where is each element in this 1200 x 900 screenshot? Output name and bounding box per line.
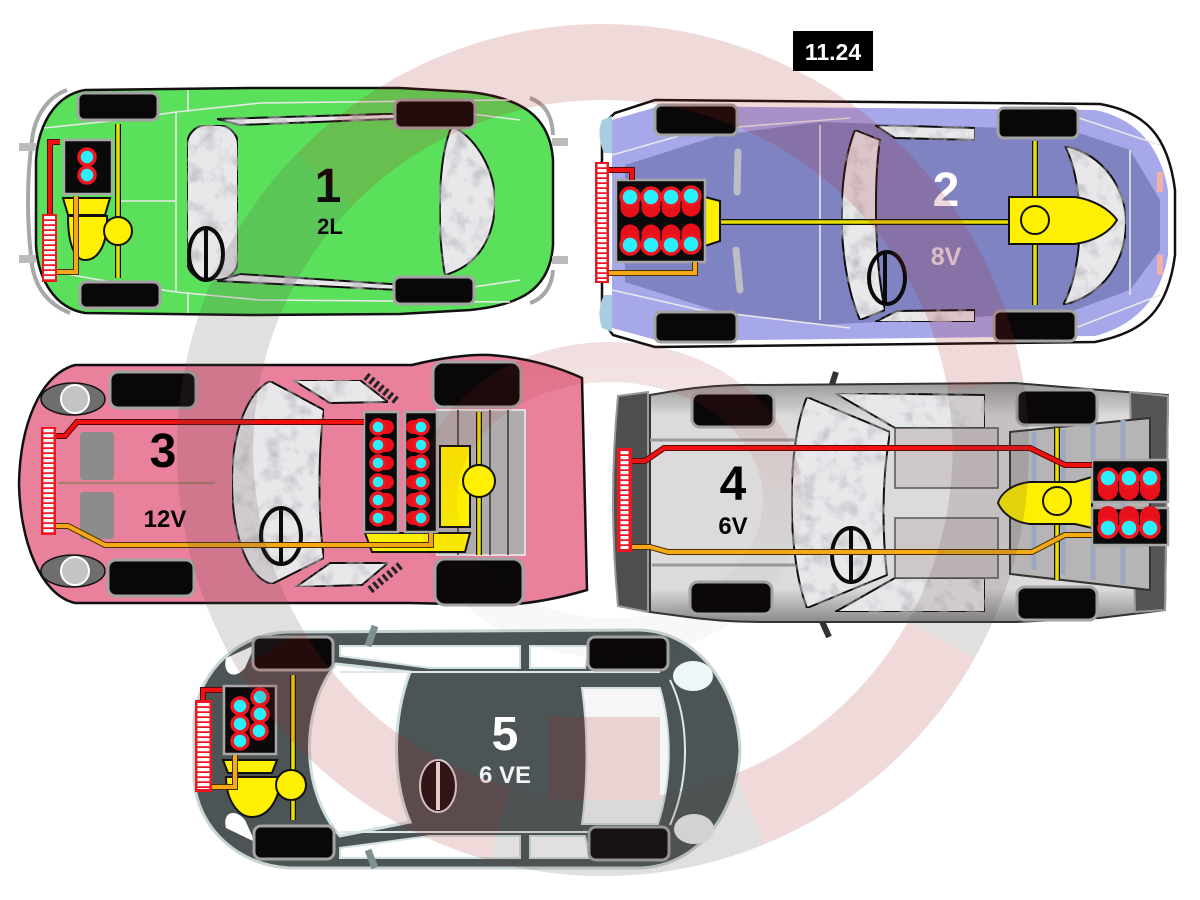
axle <box>476 412 482 555</box>
gearbox <box>63 198 110 260</box>
windscreen <box>309 664 410 836</box>
orange pipe <box>211 755 235 787</box>
rear louvers <box>437 410 525 555</box>
red pipe <box>631 448 1092 465</box>
watermark logo <box>215 62 991 838</box>
wheels <box>253 637 333 670</box>
orange pipe <box>631 535 1092 552</box>
body <box>36 88 553 315</box>
red pipe <box>606 170 632 180</box>
door strakes <box>650 440 795 565</box>
side windows <box>340 646 590 858</box>
engine label: 12V <box>144 506 186 533</box>
steering wheel <box>869 252 905 304</box>
mirrors <box>820 372 836 637</box>
engine <box>364 412 437 532</box>
differential housing <box>1009 197 1117 244</box>
body <box>650 383 1168 622</box>
side vents <box>366 376 402 590</box>
steering wheel <box>832 528 870 582</box>
hood strakes <box>736 152 740 290</box>
orange pipe <box>55 526 431 545</box>
gearbox <box>705 197 720 246</box>
windscreen <box>792 397 890 608</box>
rear deck panels <box>895 428 998 578</box>
tail lights <box>673 661 714 844</box>
number: 5 <box>492 708 518 761</box>
rear axle <box>1032 141 1038 305</box>
engine label: 2L <box>317 214 343 239</box>
car 4: 6V <box>613 372 1168 637</box>
grey ring segments <box>215 180 991 838</box>
engine <box>64 140 112 194</box>
engine label: 6V <box>718 513 748 540</box>
headlights <box>599 116 612 332</box>
side windows <box>293 380 388 587</box>
windscreen <box>842 130 885 320</box>
hood vents <box>80 432 114 480</box>
differential <box>104 217 132 245</box>
number: 2 <box>933 164 959 217</box>
gearbox <box>365 446 470 552</box>
orange pipe <box>606 262 695 273</box>
roof outline <box>340 672 685 832</box>
engine <box>224 686 276 754</box>
gearbox <box>998 477 1092 528</box>
radiator <box>617 448 632 552</box>
rear grille <box>1010 418 1150 590</box>
body lines <box>44 90 520 313</box>
axle <box>115 124 121 278</box>
differential <box>1043 487 1071 515</box>
engine <box>616 180 705 262</box>
bumpers <box>28 90 553 313</box>
steering wheel <box>189 228 223 280</box>
body <box>596 100 1175 347</box>
axle <box>290 675 296 820</box>
body <box>194 630 740 868</box>
number: 1 <box>315 160 341 213</box>
axle <box>1054 428 1060 580</box>
side windows <box>835 393 985 612</box>
inner ring <box>437 362 783 638</box>
red pipe <box>55 422 364 436</box>
date badge <box>793 31 873 71</box>
wheels <box>655 105 737 135</box>
headlights <box>41 383 105 587</box>
orange pipe <box>57 196 76 272</box>
radiator <box>42 214 57 282</box>
engine label: 6 VE <box>479 762 531 789</box>
rear vents <box>1157 172 1163 275</box>
car 3: 12V <box>19 355 587 605</box>
differential <box>1021 206 1049 234</box>
windscreen <box>187 125 238 280</box>
wheels <box>692 393 774 427</box>
radiator <box>41 427 56 535</box>
rear window <box>582 688 669 824</box>
front bumper <box>613 392 648 612</box>
wheels <box>78 93 158 120</box>
body lines <box>612 115 1160 330</box>
radiator <box>595 162 609 283</box>
gearbox <box>223 760 280 817</box>
side windows <box>875 125 975 322</box>
rear window <box>440 126 495 275</box>
body <box>19 355 587 605</box>
steering wheel <box>420 760 456 812</box>
bonnet and roof <box>625 122 1160 325</box>
red pipe <box>203 690 222 700</box>
car 5: 6 VE <box>194 626 740 868</box>
engine <box>1092 460 1168 545</box>
front wheel arches <box>225 645 255 842</box>
car 1: 2L <box>19 88 568 315</box>
mirrors <box>368 626 375 868</box>
radiator <box>195 700 212 792</box>
windscreen <box>232 381 324 584</box>
engine label: 8V <box>931 243 962 271</box>
outer ring <box>215 62 991 838</box>
number: 3 <box>150 425 176 478</box>
differential <box>276 770 306 800</box>
wings <box>612 106 1168 341</box>
side windows <box>217 113 420 291</box>
red pipe <box>50 142 60 218</box>
drive shaft <box>718 219 1012 225</box>
differential <box>463 465 495 497</box>
centre block <box>548 717 660 800</box>
car 2: 8V <box>595 100 1175 347</box>
number: 4 <box>720 458 747 511</box>
date badge: 11.24 <box>805 39 861 65</box>
rear window <box>1063 146 1126 305</box>
bumper nubs <box>19 142 568 260</box>
wheels <box>110 372 196 408</box>
rear spoiler <box>1130 392 1168 612</box>
steering wheel <box>261 508 301 564</box>
